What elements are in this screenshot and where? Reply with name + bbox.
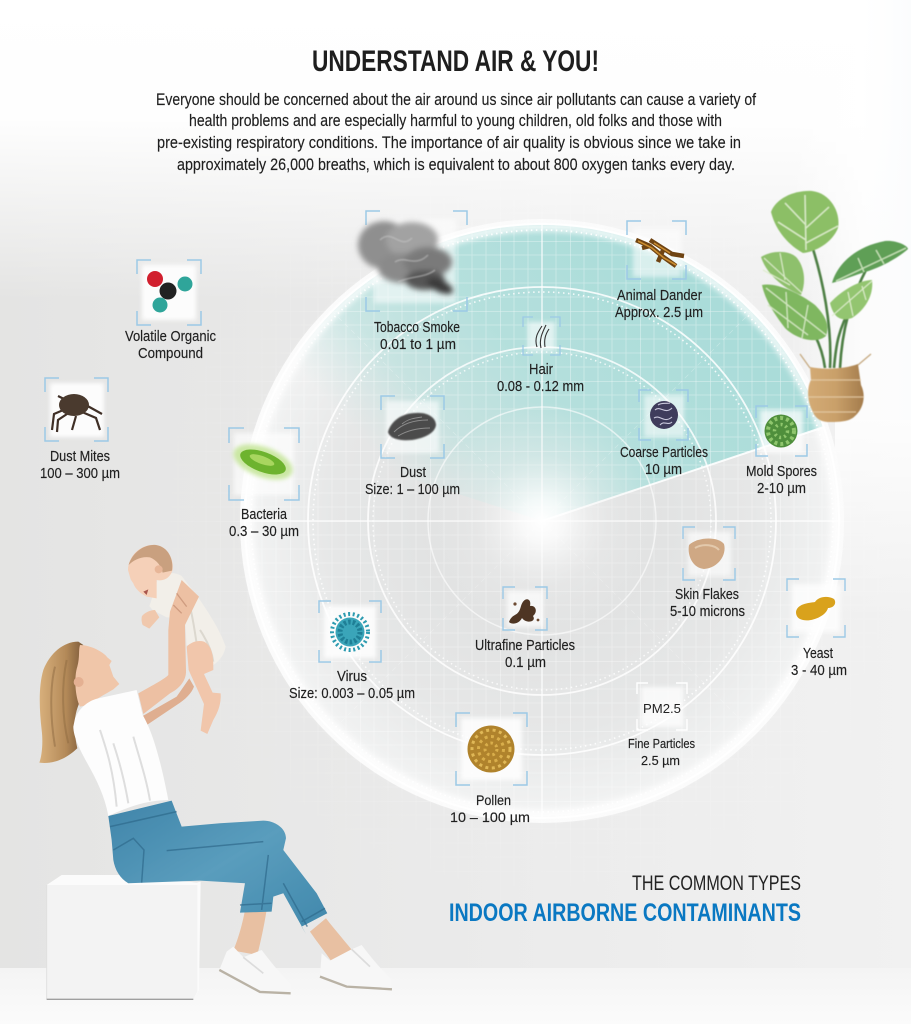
label: mold spores: 2-10 µm xyxy=(757,481,806,497)
label: coarse particles: 10 µm xyxy=(645,462,682,478)
footer heading: THE COMMON TYPES xyxy=(632,872,801,895)
intro paragraph: Everyone should be concerned about the air around us since air pollutants can cause a variety of xyxy=(156,91,756,109)
basket xyxy=(808,364,864,422)
baby head xyxy=(128,545,173,598)
icon: PM2.5: PM2.5 xyxy=(643,701,681,716)
icon: yeast xyxy=(787,579,845,637)
label: yeast xyxy=(791,646,847,679)
label: fine particles: Fine Particles xyxy=(628,736,695,751)
icon: dust xyxy=(381,396,444,458)
label: dust: Size: 1 – 100 µm xyxy=(365,482,460,498)
label: hair xyxy=(497,362,584,395)
right shoe xyxy=(320,945,392,989)
icon: skin flakes xyxy=(683,527,735,580)
icon: virus xyxy=(319,601,381,662)
label: hair: Hair xyxy=(529,362,553,378)
label: volatile organic compound: Compound xyxy=(138,346,203,362)
baby hand xyxy=(142,610,159,629)
label: dust xyxy=(365,465,460,498)
label: ultrafine particles: 0.1 µm xyxy=(505,655,546,671)
icon: PM2.5 xyxy=(637,683,687,730)
label: pollen: 10 – 100 µm xyxy=(450,810,530,825)
label: dust mites xyxy=(40,449,120,482)
icon: ultrafine particles xyxy=(503,587,547,630)
intro paragraph: health problems and are especially harmful to young children, old folks and those with xyxy=(189,112,722,130)
label: hair: 0.08 - 0.12 mm xyxy=(497,379,584,395)
hair xyxy=(39,642,83,763)
t-shirt xyxy=(73,690,168,816)
footer heading: INDOOR AIRBORNE CONTAMINANTS xyxy=(449,899,801,927)
icon: tobacco smoke xyxy=(358,211,467,311)
calves xyxy=(233,910,267,955)
baby legs xyxy=(187,641,221,734)
label: skin flakes xyxy=(670,587,745,620)
mid right leaf xyxy=(830,280,872,319)
intro paragraph: approximately 26,000 breaths, which is equivalent to about 800 oxygen tanks every day. xyxy=(177,156,735,174)
icon: bacteria xyxy=(229,428,299,500)
radar chart: concentric rings and teal sweep xyxy=(234,220,841,823)
left leaf xyxy=(761,252,804,295)
label: ultrafine particles xyxy=(475,638,575,671)
label: skin flakes: Skin Flakes xyxy=(675,587,739,603)
back arm xyxy=(142,678,194,727)
jeans xyxy=(108,801,327,934)
intro paragraph: pre-existing respiratory conditions. The importance of air quality is obvious since we take in xyxy=(157,134,741,152)
label: ultrafine particles: Ultrafine Particles xyxy=(475,638,575,654)
intro paragraph xyxy=(156,91,756,174)
label: animal dander: Approx. 2.5 µm xyxy=(615,305,703,321)
teal sweep wedge xyxy=(260,225,824,521)
potted monstera plant xyxy=(761,191,908,422)
label: fine particles xyxy=(628,736,695,768)
label: virus: Virus xyxy=(337,669,367,685)
raised arm xyxy=(138,580,199,714)
label: pollen xyxy=(450,793,530,825)
icon: dust mites xyxy=(45,378,108,441)
icon: coarse particles xyxy=(639,390,688,440)
label: mold spores: Mold Spores xyxy=(746,464,817,480)
label: tobacco smoke: Tobacco Smoke xyxy=(374,320,460,336)
icon: hair xyxy=(523,317,560,355)
label: volatile organic compound xyxy=(125,329,216,362)
title: UNDERSTAND AIR & YOU! xyxy=(312,45,599,78)
label: coarse particles: Coarse Particles xyxy=(620,445,708,461)
icon: animal dander xyxy=(627,221,686,279)
stems xyxy=(790,225,868,368)
icon: mold spores xyxy=(756,406,807,456)
white cube seat xyxy=(47,875,201,999)
label: dust mites: Dust Mites xyxy=(50,449,110,465)
icon: pollen xyxy=(456,713,527,785)
label: mold spores xyxy=(746,464,817,497)
label: bacteria: Bacteria xyxy=(241,507,288,523)
label: dust: Dust xyxy=(400,465,426,481)
label: animal dander: Animal Dander xyxy=(617,288,702,304)
label: coarse particles xyxy=(620,445,708,478)
baby body xyxy=(149,573,226,669)
label: volatile organic compound: Volatile Organic xyxy=(125,329,216,345)
label: yeast: 3 - 40 µm xyxy=(791,663,847,679)
woman holding baby xyxy=(39,545,392,993)
label: skin flakes: 5-10 microns xyxy=(670,604,745,620)
label: tobacco smoke: 0.01 to 1 µm xyxy=(380,337,456,353)
label: pollen: Pollen xyxy=(476,793,511,808)
label: animal dander xyxy=(615,288,703,321)
label: yeast: Yeast xyxy=(803,646,833,662)
label: dust mites: 100 – 300 µm xyxy=(40,466,120,482)
label: virus: Size: 0.003 – 0.05 µm xyxy=(289,686,415,702)
top leaf xyxy=(771,191,838,253)
footer heading xyxy=(449,872,801,927)
label: fine particles: 2.5 µm xyxy=(641,753,680,768)
right leaf xyxy=(832,241,908,283)
label: bacteria xyxy=(229,507,299,540)
icon: volatile organic compound xyxy=(137,260,201,325)
left shoe xyxy=(219,947,291,993)
lower left leaf xyxy=(762,284,827,340)
head and neck xyxy=(75,645,119,707)
label: tobacco smoke xyxy=(374,320,460,353)
label: virus xyxy=(289,669,415,702)
label: bacteria: 0.3 – 30 µm xyxy=(229,524,299,540)
